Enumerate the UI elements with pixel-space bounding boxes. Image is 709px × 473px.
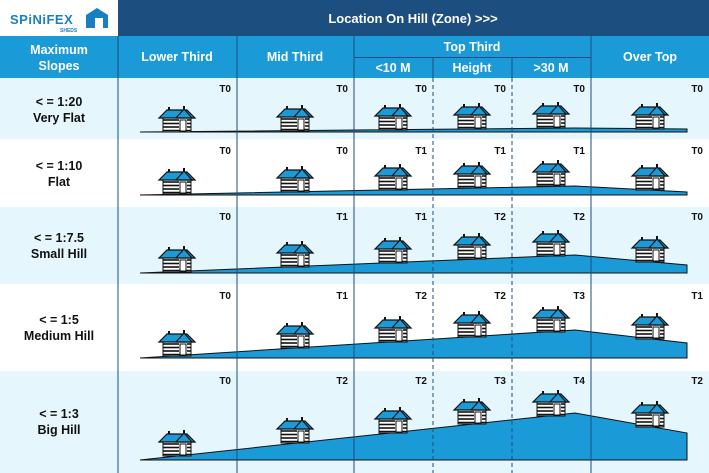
row labels: < = 1:3 bbox=[39, 407, 79, 421]
zone labels: T0 bbox=[573, 84, 585, 95]
zone labels: T2 bbox=[573, 212, 585, 223]
zone labels: T0 bbox=[494, 84, 506, 95]
row labels: < = 1:10 bbox=[36, 159, 82, 173]
zone labels: T1 bbox=[573, 146, 585, 157]
header bar: Location On Hill (Zone) >>> bbox=[328, 11, 498, 26]
zone labels: T2 bbox=[415, 376, 427, 387]
zone labels: T2 bbox=[415, 291, 427, 302]
column headers: >30 M bbox=[533, 61, 569, 75]
zone labels: T1 bbox=[336, 212, 348, 223]
row labels: Small Hill bbox=[31, 247, 87, 261]
header bar bbox=[118, 0, 709, 36]
row labels: Flat bbox=[48, 175, 71, 189]
zone labels: T1 bbox=[336, 291, 348, 302]
column headers: Over Top bbox=[623, 50, 677, 64]
zone labels: T0 bbox=[219, 376, 231, 387]
zone labels: T3 bbox=[573, 291, 585, 302]
column headers: Top Third bbox=[444, 40, 500, 54]
zone labels: T0 bbox=[691, 146, 703, 157]
column headers: <10 M bbox=[375, 61, 411, 75]
zone labels: T4 bbox=[573, 376, 585, 387]
zone labels: T0 bbox=[691, 212, 703, 223]
zone labels: T1 bbox=[415, 146, 427, 157]
zone labels: T0 bbox=[336, 84, 348, 95]
row labels: < = 1:7.5 bbox=[34, 231, 84, 245]
row labels: Very Flat bbox=[33, 111, 86, 125]
zone labels: T3 bbox=[494, 376, 506, 387]
houses bbox=[159, 102, 668, 456]
row labels bbox=[24, 95, 94, 437]
zone labels: T0 bbox=[691, 84, 703, 95]
logo: SPiNiFEX bbox=[10, 12, 73, 27]
zone labels: T0 bbox=[415, 84, 427, 95]
row labels: Big Hill bbox=[37, 423, 81, 437]
zone labels: T2 bbox=[494, 212, 506, 223]
zone labels: T0 bbox=[219, 291, 231, 302]
row labels: < = 1:5 bbox=[39, 313, 79, 327]
hills bbox=[140, 128, 687, 460]
zone labels: T2 bbox=[336, 376, 348, 387]
zone labels: T2 bbox=[691, 376, 703, 387]
column headers bbox=[0, 36, 709, 78]
column headers: Maximum bbox=[30, 43, 88, 57]
zone labels: T1 bbox=[494, 146, 506, 157]
column headers: Height bbox=[453, 61, 492, 75]
zone labels: T1 bbox=[691, 291, 703, 302]
zone labels: T0 bbox=[336, 146, 348, 157]
zone labels: T0 bbox=[219, 212, 231, 223]
column headers: Mid Third bbox=[267, 50, 323, 64]
zone labels bbox=[219, 84, 703, 387]
zone labels: T1 bbox=[415, 212, 427, 223]
row labels: Medium Hill bbox=[24, 329, 94, 343]
zone labels: T2 bbox=[494, 291, 506, 302]
column headers: Slopes bbox=[38, 59, 80, 73]
column lines bbox=[118, 36, 591, 473]
logo bbox=[10, 8, 108, 34]
zone labels: T0 bbox=[219, 146, 231, 157]
zone labels: T0 bbox=[219, 84, 231, 95]
column headers: Lower Third bbox=[141, 50, 213, 64]
row labels: < = 1:20 bbox=[36, 95, 82, 109]
logo: SHEDS bbox=[60, 28, 78, 34]
